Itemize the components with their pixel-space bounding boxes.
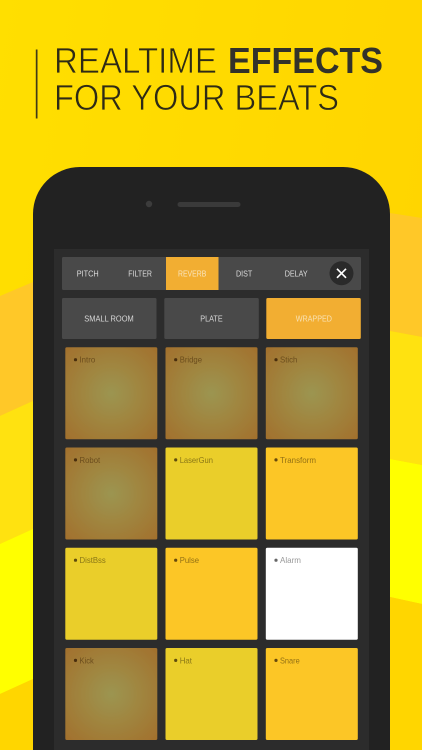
- button: small room: [62, 298, 156, 339]
- speaker: [178, 202, 240, 207]
- headline line 2: FOR YOUR BEATS: [54, 77, 339, 118]
- pad: Kick: Kick: [80, 655, 94, 665]
- headline line 1: [54, 40, 383, 81]
- pad: Stich: Stich: [280, 355, 298, 365]
- effect tabs: [62, 257, 361, 290]
- active tab: reverb: [166, 257, 218, 290]
- effect tabs: DIST: [236, 269, 252, 278]
- phone: [33, 167, 390, 750]
- icon: camera: [146, 201, 152, 207]
- pad: Stich: [266, 347, 358, 439]
- pad: Hat: Hat: [180, 655, 193, 665]
- phone body: [33, 167, 390, 750]
- pad: Transform: Transform: [280, 455, 316, 465]
- pad: DistBss: [65, 548, 157, 640]
- pad: Snare: Snare: [280, 655, 300, 665]
- pad: Transform: [266, 448, 358, 540]
- pad: Intro: [65, 347, 157, 439]
- effect tabs: PITCH: [77, 269, 99, 278]
- headline line 1: REALTIME: [54, 40, 217, 81]
- button: wrapped: WRAPPED: [296, 314, 332, 324]
- icon: close button: [330, 261, 354, 285]
- button: wrapped: [266, 298, 361, 339]
- pad: Robot: [65, 448, 157, 540]
- button: plate: [164, 298, 259, 339]
- button: plate: PLATE: [200, 314, 223, 324]
- pad: LaserGun: LaserGun: [180, 455, 213, 465]
- headline line 1: EFFECTS: [228, 40, 383, 81]
- effect tabs: FILTER: [128, 269, 152, 278]
- button: small room: SMALL ROOM: [84, 314, 134, 324]
- pad: Pulse: Pulse: [180, 555, 199, 565]
- reverb type buttons: [62, 298, 361, 339]
- pad: LaserGun: [166, 448, 258, 540]
- pad: Robot: Robot: [80, 455, 101, 465]
- pad: Alarm: [266, 548, 358, 640]
- title: [36, 40, 383, 118]
- pad: DistBss: DistBss: [80, 555, 106, 565]
- title accent line: [36, 50, 38, 118]
- pad: Alarm: Alarm: [280, 555, 301, 565]
- pad: Intro: Intro: [80, 355, 95, 365]
- panel: app screen: [54, 249, 369, 750]
- pad: Hat: [166, 648, 258, 740]
- pad: Snare: [266, 648, 358, 740]
- pad: Bridge: [166, 347, 258, 439]
- effect tabs: REVERB: [178, 269, 207, 278]
- pad: Pulse: [166, 548, 258, 640]
- sample pads: [65, 347, 358, 740]
- pad: Bridge: Bridge: [180, 355, 202, 365]
- effect tabs: DELAY: [285, 269, 308, 278]
- pad: Kick: [65, 648, 157, 740]
